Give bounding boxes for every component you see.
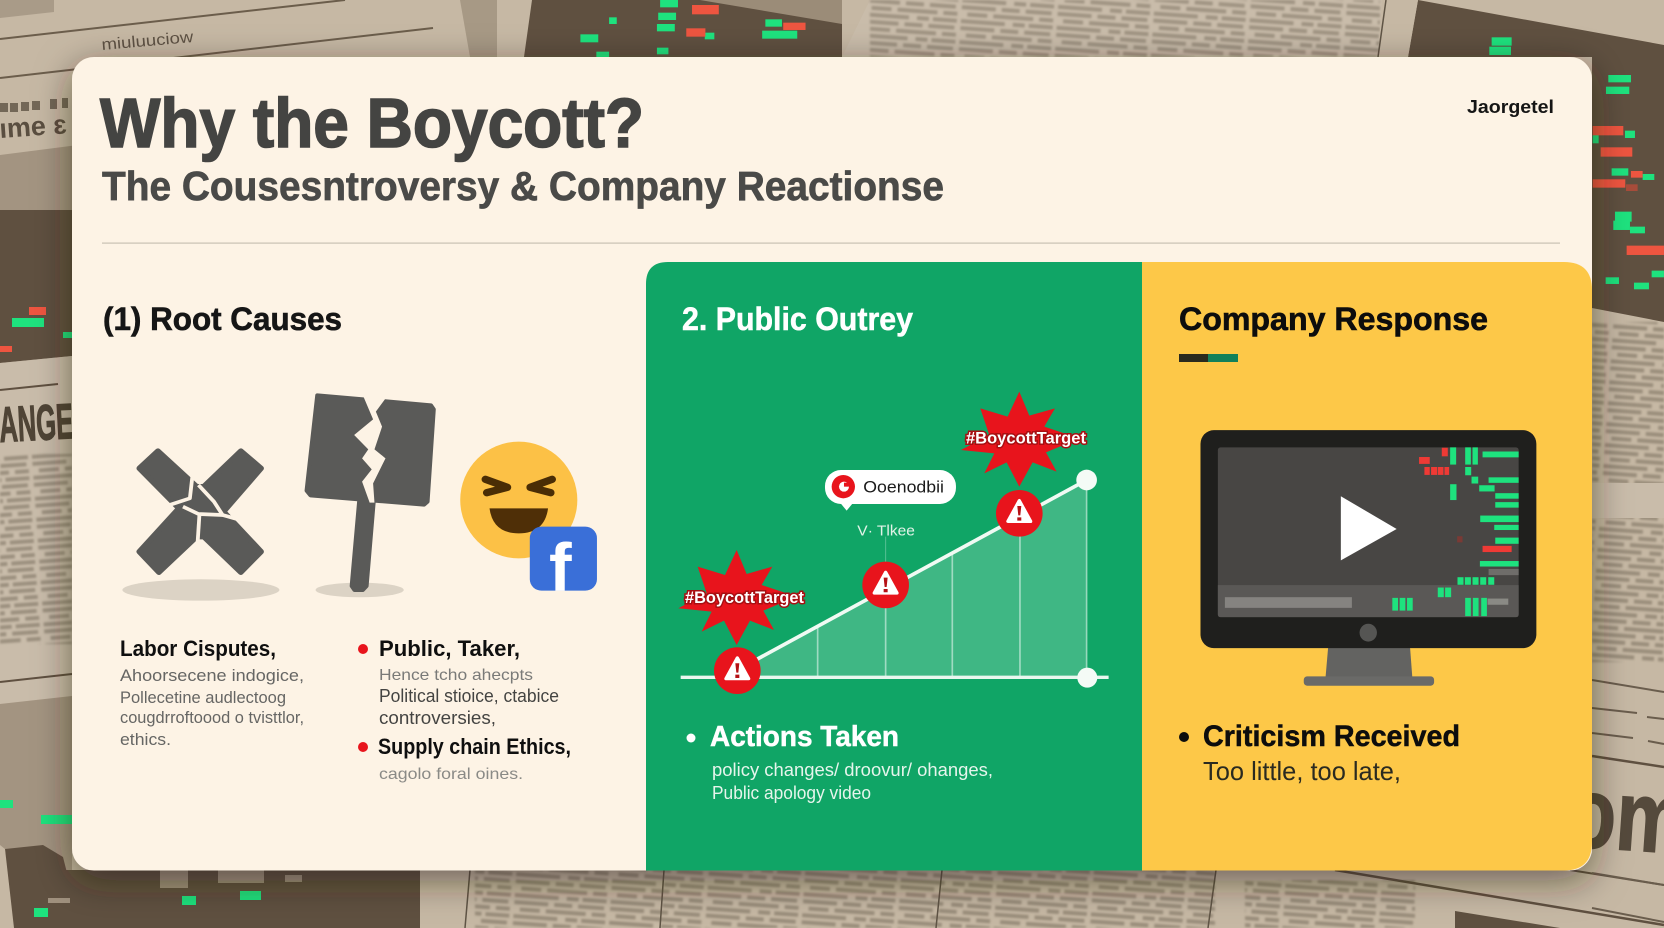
cause: labor disputes: Pollecetine audlectoog (120, 688, 286, 707)
cause: public taker: controversies, (379, 708, 496, 728)
icon: facebook f: f (549, 530, 572, 606)
cause: supply chain ethics: Supply chain Ethics, (378, 734, 571, 759)
actions taken (686, 721, 993, 803)
heading: root causes: (1) Root Causes (103, 301, 342, 337)
speech bubble: Ooenodbii (863, 478, 944, 497)
cause: public taker: Political stioice, ctabice (379, 686, 559, 706)
background: newspaper collage: ANGE (0, 393, 74, 453)
left and bottom ticker bars (0, 307, 302, 917)
cause: labor disputes: Ahoorsecene indogice, (120, 666, 304, 685)
cause: labor disputes: ethics. (120, 730, 171, 749)
cause: public taker: Hence tcho ahecpts (379, 667, 533, 684)
cause: public taker: Public, Taker, (379, 636, 520, 661)
warning marker 3 (996, 490, 1043, 537)
criticism received: Criticism Received (1203, 720, 1460, 753)
background: newspaper collage: miuluuciow (101, 29, 195, 54)
warning marker 1 (714, 647, 761, 694)
header divider (102, 242, 1560, 244)
burst: boycott tag high: #BoycottTarget (966, 428, 1086, 447)
heading: company response: Company Response (1179, 301, 1488, 337)
icon: broken cross (122, 451, 279, 601)
cause: labor disputes: Labor Cisputes, (120, 636, 276, 661)
panel: root causes (103, 301, 597, 783)
background: newspaper collage: ıme ɛ (0, 109, 68, 144)
accent bar (1179, 354, 1238, 362)
title: Why the Boycott? (100, 84, 644, 162)
panel: company response (1142, 262, 1592, 870)
icon: broken protest sign (307, 393, 434, 597)
burst: boycott tag low: #BoycottTarget (685, 588, 804, 607)
warning marker 2 (862, 562, 909, 608)
criticism received (1179, 720, 1460, 786)
top ticker bars (580, 0, 806, 57)
heading: public outcry: 2. Public Outrey (682, 301, 913, 337)
speech bubble (825, 470, 956, 511)
cause: labor disputes (120, 636, 304, 749)
panel: public outcry (646, 262, 1142, 870)
cause: supply chain ethics: cagolo foral oines. (379, 766, 523, 783)
icon: monitor with video (1200, 430, 1536, 686)
brand label: Jaorgetel (1467, 97, 1554, 117)
subtitle: The Cousesntroversy & Company Reactionse (102, 163, 944, 209)
cause: supply chain ethics (358, 734, 571, 783)
burst: boycott tag high (961, 392, 1086, 487)
right ticker bars (1489, 37, 1664, 289)
actions taken: policy changes/ droovur/ ohanges, (712, 760, 993, 780)
actions taken: Actions Taken (710, 721, 899, 753)
label above chart: V· Tlkee (857, 524, 915, 540)
icon: laughing emoji with facebook badge (460, 442, 597, 591)
criticism received: Too little, too late, (1203, 756, 1401, 786)
line chart: escalating outcry (678, 392, 1109, 694)
burst: boycott tag low (678, 550, 804, 645)
actions taken: Public apology video (712, 783, 871, 803)
cause: public taker (358, 636, 559, 728)
cause: labor disputes: cougdrroftoood o tvisttlor, (120, 708, 304, 727)
